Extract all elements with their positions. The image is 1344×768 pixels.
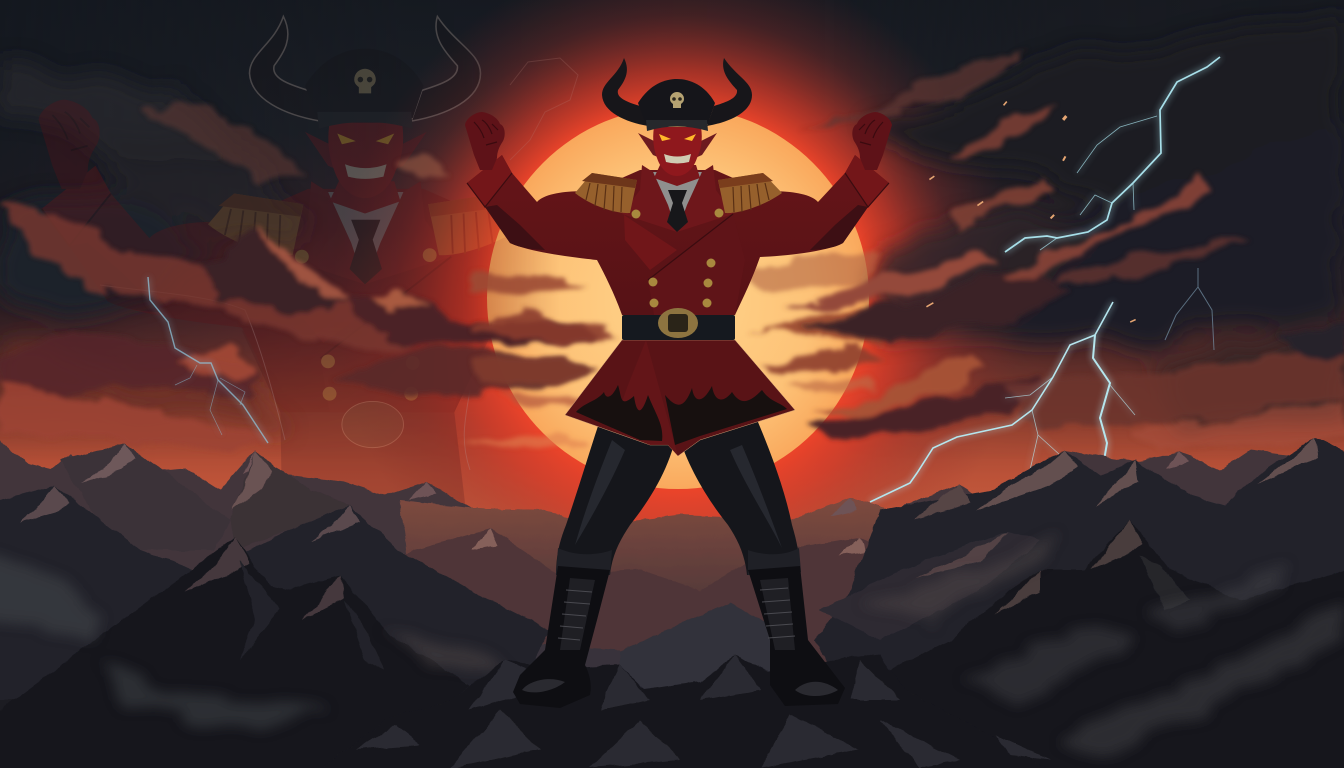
ghost outline: lower body line — [100, 285, 470, 470]
ghost demon apparition in the clouds — [38, 14, 546, 504]
far mountain range — [0, 430, 1344, 660]
lightning bolt: faint far right — [1165, 268, 1214, 350]
demon general figure — [465, 58, 892, 708]
setting sun disc — [487, 107, 869, 489]
flying embers — [926, 101, 1136, 323]
legs — [556, 415, 801, 575]
right boot — [748, 566, 845, 706]
red sun glow — [333, 0, 1023, 643]
horns — [602, 58, 752, 126]
near mountains: right — [890, 520, 1344, 768]
hazy middle mountains — [380, 528, 910, 700]
ghost outline: faint right fist — [510, 58, 578, 160]
dark base behind mountains — [0, 600, 1344, 768]
left fist — [465, 112, 505, 170]
coat skirt — [565, 340, 795, 456]
belt with buckle — [622, 308, 735, 340]
lit red clouds: left side — [0, 105, 600, 450]
mid mountain range: right — [815, 437, 1344, 700]
lightning bolt: lower right — [870, 302, 1135, 502]
lightning bolt: upper right — [1005, 57, 1220, 252]
mid mountain range: left — [0, 443, 550, 700]
right fist — [852, 112, 892, 170]
sky background — [0, 66, 1344, 522]
distant dark storm clouds — [0, 20, 1344, 430]
coat, arms, collar, tie, epaulettes and buttons — [467, 155, 889, 315]
head and officer cap — [638, 79, 717, 186]
lightning bolt: left — [148, 277, 268, 443]
mist over the mountains — [0, 532, 1344, 755]
lit red clouds: right side — [785, 50, 1344, 450]
near mountains: left — [0, 537, 470, 768]
left boot — [513, 566, 610, 708]
cloud bands across the sun — [460, 255, 890, 450]
foreground rocky summit — [295, 655, 1085, 768]
